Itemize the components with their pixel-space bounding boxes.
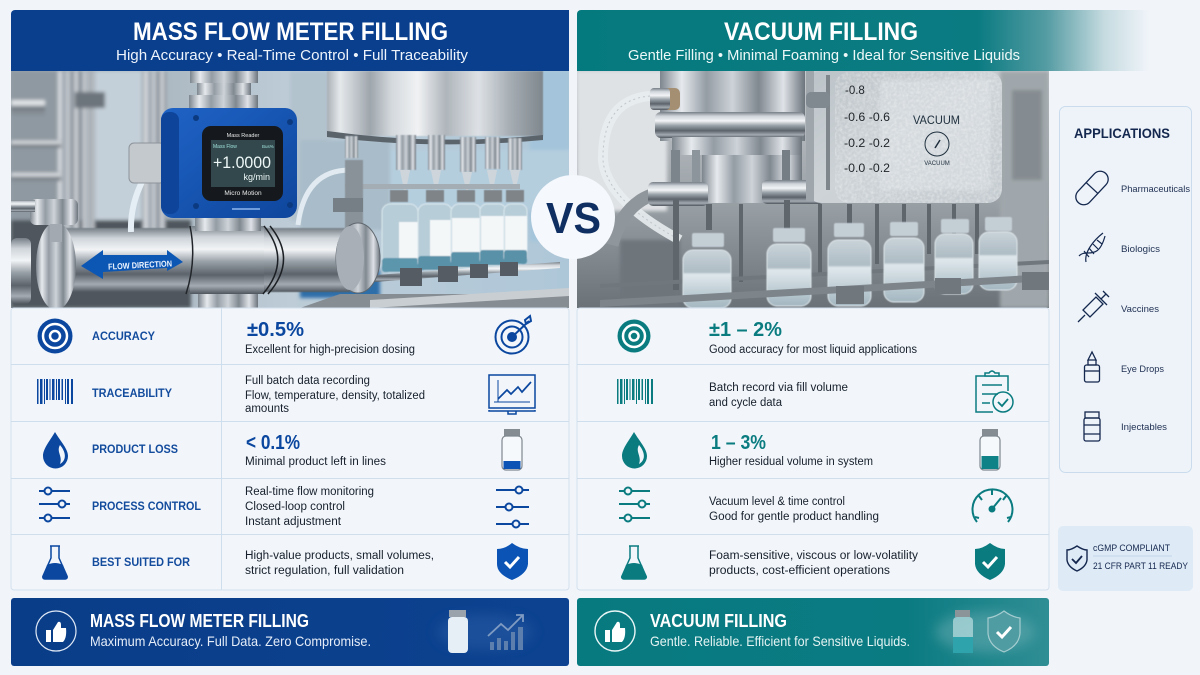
- application: pharmaceuticals: [1073, 168, 1190, 208]
- row: accuracy: ±0.5%: [247, 319, 304, 341]
- photo: vacuum filling tank and vials: [577, 71, 1049, 308]
- row: vacuum traceability: Batch record via fill volume: [709, 382, 848, 394]
- application: biologics: [1079, 233, 1160, 262]
- flow direction arrow: FLOW DIRECTION: [108, 258, 172, 272]
- panel: compliance badge: [1058, 526, 1193, 591]
- icon: thumbs up teal: [595, 611, 635, 651]
- tubing: [298, 170, 350, 225]
- rails behind vials: [673, 260, 1049, 284]
- heading: applications: APPLICATIONS: [1074, 125, 1170, 141]
- icon: target badge: [38, 318, 72, 354]
- glass vacuum chamber: [806, 71, 1002, 203]
- flow direction arrow: [81, 250, 183, 279]
- meter housing and display: kg/min: [243, 172, 270, 182]
- subtitle: vacuum benefits: Gentle Filling • Minimal Foaming • Ideal for Sensitive Liquids: [628, 47, 1020, 64]
- meter housing and display: [161, 108, 297, 218]
- panel: mass flow footer: Maximum Accuracy. Full Data. Zero Compromise.: [90, 633, 371, 649]
- icon: target with arrow: [496, 316, 531, 354]
- glass vacuum chamber: VACUUM: [924, 161, 950, 167]
- panel: compliance badge: cGMP COMPLIANT: [1093, 543, 1170, 554]
- icon: gauge: [972, 489, 1013, 522]
- row: vacuum product loss: Higher residual volume in system: [709, 456, 873, 468]
- vs badge: VS: [546, 194, 601, 243]
- icon: vial and rising chart: [437, 610, 533, 653]
- row: vacuum accuracy: ±1 – 2%: [709, 319, 782, 341]
- row: best suited for: [43, 543, 528, 580]
- row: vacuum process control: Vacuum level & time control: [709, 496, 845, 508]
- row: vacuum process control: [619, 488, 1013, 523]
- icon: vial low level: [502, 429, 522, 470]
- filling needles: [673, 200, 979, 290]
- panel: vacuum footer: Gentle. Reliable. Efficient for Sensitive Liquids.: [650, 633, 910, 649]
- icon: flask teal: [622, 546, 646, 579]
- panel: vacuum comparison table: [577, 308, 1049, 590]
- panel: compliance badge: 21 CFR PART 11 READY: [1093, 561, 1189, 572]
- icon: flask: [43, 546, 67, 579]
- glass vials: [683, 217, 1017, 308]
- meter housing and display: Mass Flow: [213, 144, 237, 150]
- row: vacuum product loss: [622, 429, 1000, 470]
- row: vacuum process control: Good for gentle product handling: [709, 511, 879, 523]
- icon: chart monitor: [489, 375, 535, 414]
- row: vacuum accuracy: Good accuracy for most liquid applications: [709, 344, 917, 356]
- panel: mass flow footer: [11, 598, 569, 666]
- row: process control: [39, 486, 529, 528]
- row: vacuum best suited: products, cost-efficient operations: [709, 565, 890, 577]
- application: eye drops: Eye Drops: [1121, 364, 1164, 375]
- row: vacuum product loss: 1 – 3%: [711, 432, 766, 454]
- application: injectables: Injectables: [1121, 422, 1167, 433]
- rails: [600, 276, 1022, 307]
- icon: thumbs up: [36, 611, 76, 651]
- conveyor: [300, 294, 569, 308]
- row: process control: PROCESS CONTROL: [92, 499, 201, 513]
- meter housing and display: Micro Motion: [224, 190, 262, 197]
- icon: shield check: [497, 543, 528, 580]
- row: process control: Real-time flow monitoring: [245, 486, 374, 498]
- row: traceability: Full batch data recording: [245, 375, 370, 387]
- row: vacuum traceability: [617, 371, 1013, 412]
- icon: barcode teal: [617, 379, 653, 404]
- icon: drop teal: [622, 432, 647, 468]
- row: vacuum traceability: and cycle data: [709, 397, 783, 409]
- icon: sliders teal: [619, 488, 650, 522]
- heading: mass flow meter filling: MASS FLOW METER FILLING: [133, 18, 448, 46]
- icon: vial teal: [980, 429, 1000, 470]
- icon: shield check teal: [975, 543, 1005, 580]
- row: product loss: [43, 429, 522, 470]
- glass vacuum chamber: -0.8: [845, 85, 865, 97]
- application: pharmaceuticals: Pharmaceuticals: [1121, 184, 1190, 195]
- steel tank: [660, 71, 805, 141]
- meter housing and display: +1.0000: [213, 153, 271, 172]
- row: vacuum best suited: Foam-sensitive, viscous or low-volatility: [709, 550, 918, 562]
- row: product loss: < 0.1%: [246, 432, 300, 454]
- glass vacuum chamber: -0.2 -0.2: [844, 138, 890, 150]
- meter housing and display: Mass Reader: [227, 133, 260, 139]
- application: vaccines: Vaccines: [1121, 304, 1159, 315]
- top pipe stub: [190, 71, 258, 83]
- heading: vacuum filling: VACUUM FILLING: [724, 18, 918, 46]
- icon: target badge teal: [618, 320, 650, 352]
- row: vacuum best suited: [622, 543, 1005, 580]
- row: accuracy: [38, 316, 531, 356]
- tank: [327, 71, 543, 136]
- panel: mass flow meter header: [11, 10, 569, 71]
- glass vacuum chamber: -0.6 -0.6: [844, 112, 890, 124]
- panel: vacuum footer: VACUUM FILLING: [650, 611, 787, 631]
- row: process control: Instant adjustment: [245, 516, 342, 528]
- application: eye drops: [1084, 352, 1164, 382]
- application: injectables: [1084, 412, 1167, 441]
- application: biologics: Biologics: [1121, 244, 1160, 255]
- photo: mass flow meter on filling line: [11, 71, 570, 310]
- panel: vacuum filling header: [577, 10, 1150, 71]
- icon: sliders right: [496, 486, 529, 528]
- panel: applications: [1060, 106, 1192, 472]
- row: traceability: Flow, temperature, density, totalized: [245, 390, 425, 402]
- main pipe: [50, 228, 350, 292]
- panel: vacuum footer: [577, 598, 1049, 666]
- vs badge: [531, 175, 615, 259]
- meter housing and display: Bus%: [262, 144, 274, 149]
- icon: vial and shield: [935, 610, 1035, 653]
- subtitle: mass flow benefits: High Accuracy • Real-Time Control • Full Traceability: [116, 47, 468, 64]
- row: best suited for: High-value products, small volumes,: [245, 550, 434, 562]
- flanges: [336, 223, 380, 293]
- application: vaccines: [1078, 291, 1159, 322]
- side pipe: [608, 190, 649, 246]
- glass vacuum chamber: -0.0 -0.2: [844, 163, 890, 175]
- row: best suited for: BEST SUITED FOR: [92, 555, 190, 569]
- row: process control: Closed-loop control: [245, 501, 345, 513]
- row: accuracy: Excellent for high-precision dosing: [245, 344, 415, 356]
- icon: drop: [43, 432, 68, 468]
- row: vacuum accuracy: [618, 319, 917, 356]
- coiled tube: [603, 96, 680, 240]
- row: best suited for: strict regulation, full validation: [245, 565, 404, 577]
- glass vacuum chamber: VACUUM: [913, 113, 960, 127]
- meter cable: [131, 180, 143, 232]
- row: accuracy: ACCURACY: [92, 329, 155, 343]
- row: traceability: TRACEABILITY: [92, 386, 172, 400]
- row: product loss: PRODUCT LOSS: [92, 442, 178, 456]
- row: traceability: [37, 375, 535, 415]
- icon: sliders: [39, 488, 70, 522]
- icon: clipboard check: [976, 371, 1013, 412]
- row: traceability: amounts: [245, 403, 289, 415]
- icon: compliance shield: [1067, 546, 1087, 571]
- vials: [382, 190, 527, 272]
- icon: barcode: [37, 379, 73, 404]
- panel: mass flow footer: MASS FLOW METER FILLING: [90, 611, 309, 631]
- row: product loss: Minimal product left in lines: [245, 456, 386, 468]
- panel: mass flow comparison table: [11, 308, 569, 590]
